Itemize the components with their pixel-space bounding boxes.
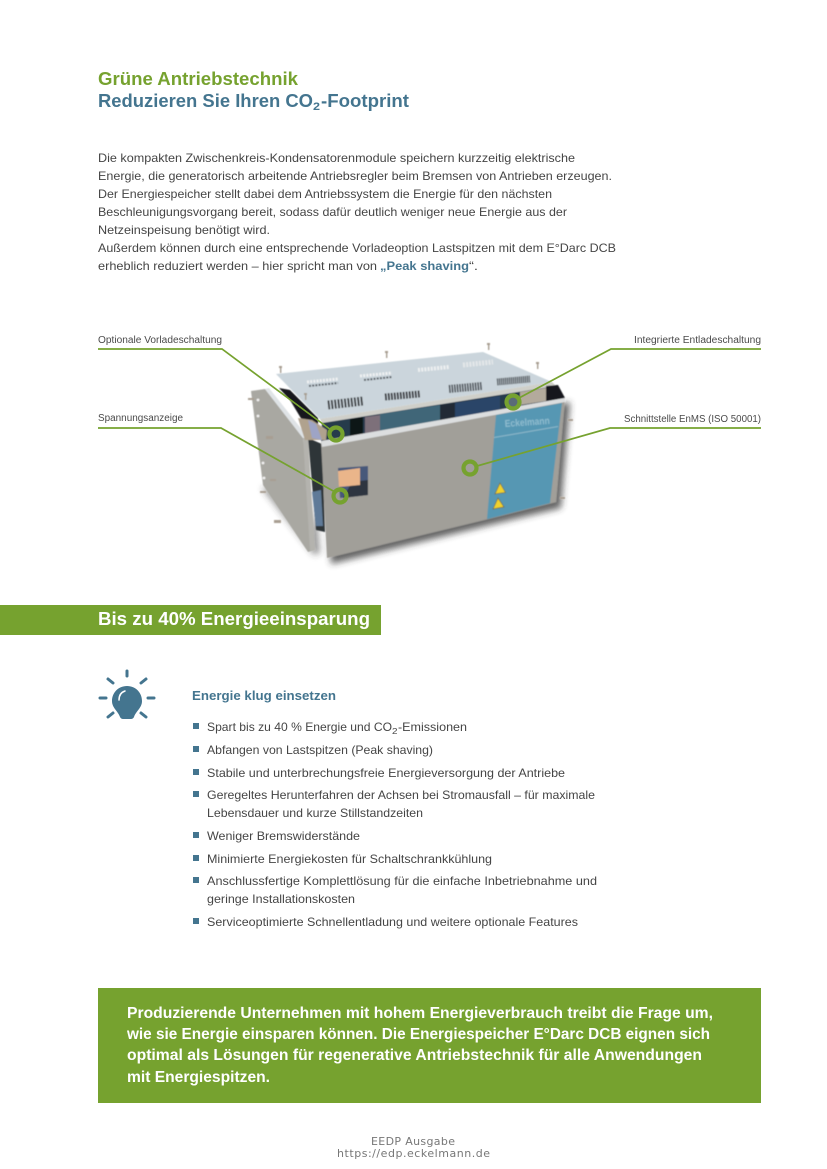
inner electronics side <box>308 438 325 532</box>
footer: EEDP Ausgabe <box>371 1135 455 1148</box>
icon: light bulb <box>100 671 154 719</box>
top cover plate <box>276 352 552 419</box>
footer <box>337 1135 490 1160</box>
callout: Spannungsanzeige: Spannungsanzeige <box>98 413 183 424</box>
connector near precharge <box>298 418 327 440</box>
title: -Footprint <box>321 91 409 111</box>
intro paragraph: Netzeinspeisung benötigt wird. <box>98 223 270 237</box>
bullet list: Spart bis zu 40 % Energie und CO <box>207 720 392 734</box>
banner: Bis zu 40% Energieeinsparung <box>0 605 381 635</box>
bullet list: geringe Installationskosten <box>207 892 355 906</box>
intro paragraph <box>98 151 616 273</box>
flange holes <box>257 399 265 479</box>
bullet list <box>193 720 597 929</box>
callout: Schnittstelle EnMS <box>464 414 761 474</box>
dark interior corner <box>279 388 318 432</box>
bullet list: Geregeltes Herunterfahren der Achsen bei Stromausfall – für maximale <box>207 788 595 802</box>
intro paragraph: Der Energiespeicher stellt dabei dem Antriebssystem die Energie für den nächsten <box>98 187 552 201</box>
bullet list: -Emissionen <box>398 720 467 734</box>
front panel <box>321 398 565 558</box>
callout: Integrierte Entladeschaltung: Integrierte Entladeschaltung <box>634 335 761 346</box>
bullet list: Anschlussfertige Komplettlösung für die einfache Inbetriebnahme und <box>207 874 597 888</box>
display window <box>338 466 368 498</box>
intro paragraph: „Peak shaving <box>380 259 469 273</box>
logo on door: Eckelmann <box>504 416 550 430</box>
bullet list: Lebensdauer und kurze Stillstandzeiten <box>207 806 423 820</box>
bullet list: Abfangen von Lastspitzen (Peak shaving) <box>207 743 433 757</box>
bullet list: Minimierte Energiekosten für Schaltschrankkühlung <box>207 852 492 866</box>
callout box: green summary: optimal als Lösungen für regenerative Antriebstechnik für alle Anwendungen <box>127 1047 702 1064</box>
callout: Spannungsanzeige <box>98 413 346 502</box>
heading: Energie klug einsetzen: Energie klug einsetzen <box>192 688 336 703</box>
bullet list: Stabile und unterbrechungsfreie Energieversorgung der Antriebe <box>207 766 565 780</box>
callout box: green summary: mit Energiespitzen. <box>127 1069 270 1086</box>
callout: Integrierte Entladeschaltung <box>506 335 761 408</box>
intro paragraph: Die kompakten Zwischenkreis-Kondensatorenmodule speichern kurzzeitig elektrische <box>98 151 575 165</box>
callout box: green summary: wie sie Energie einsparen können. Die Energiespeicher E°Darc DCB eignen sich <box>126 1026 710 1043</box>
intro paragraph: Außerdem können durch eine entsprechende Vorladeoption Lastspitzen mit dem E°Darc DCB <box>98 241 616 255</box>
screws <box>248 343 573 523</box>
footer: https://edp.eckelmann.de <box>337 1147 490 1160</box>
blue door <box>487 403 562 519</box>
callout: Optionale Vorladeschaltung <box>98 335 342 440</box>
callout: Schnittstelle EnMS: Schnittstelle EnMS (ISO 50001) <box>624 414 761 425</box>
callout box: green summary <box>98 988 761 1103</box>
callout: Optionale Vorladeschaltung: Optionale Vorladeschaltung <box>98 335 222 346</box>
warning triangles <box>495 483 506 494</box>
intro paragraph: Beschleunigungsvorgang bereit, sodass dafür deutlich weniger neue Energie aus der <box>98 205 567 219</box>
title: Reduzieren Sie Ihren CO <box>98 91 313 111</box>
title <box>98 69 409 113</box>
banner: Bis zu 40% Energieeinsparung: Bis zu 40% Energieeinsparung <box>98 609 370 629</box>
title: Grüne Antriebstechnik <box>98 69 299 89</box>
product illustration: capacitor module <box>248 343 573 564</box>
machine shadow <box>325 402 570 564</box>
callout box: green summary: Produzierende Unternehmen mit hohem Energieverbrauch treibt die Frage um, <box>127 1005 713 1022</box>
intro paragraph: erheblich reduziert werden – hier spricht man von <box>98 259 377 273</box>
interior electronics band <box>321 386 565 442</box>
flange side panel <box>251 389 315 552</box>
bullet list: 2 <box>392 727 398 736</box>
intro paragraph: Energie, die generatorisch arbeitende Antriebsregler beim Bremsen von Antrieben erzeugen. <box>98 169 612 183</box>
bullet list: Serviceoptimierte Schnellentladung und weitere optionale Features <box>207 915 578 929</box>
intro paragraph: “. <box>469 259 478 273</box>
bullet list: Weniger Bremswiderstände <box>207 829 360 843</box>
cover vents <box>307 362 530 405</box>
title: 2 <box>313 101 320 113</box>
